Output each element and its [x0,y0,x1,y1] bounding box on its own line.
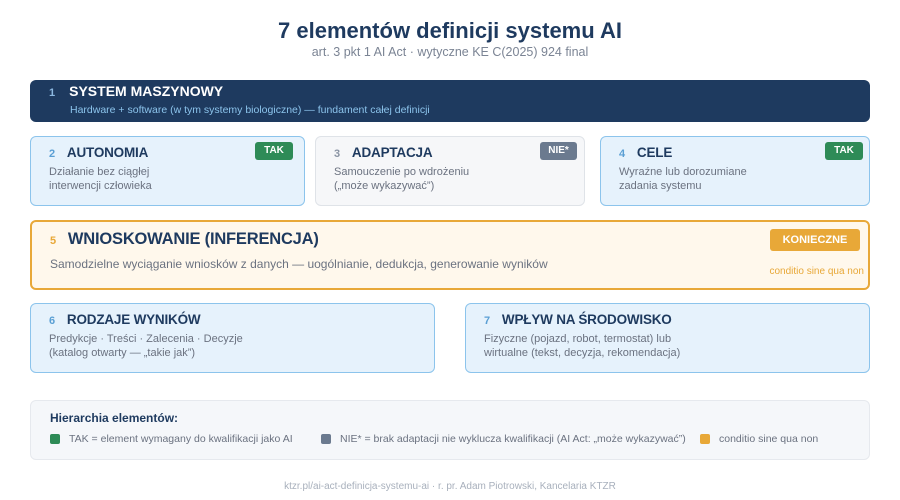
heading 2: 2 AUTONOMIA [49,145,148,160]
subtitle: art. 3 pkt 1 AI Act · wytyczne KE C(2025) 924 final [312,45,588,59]
panel 6: rodzaje wyników [30,303,435,373]
text 1: Hardware + software (w tym systemy biologiczne) — fundament całej definicji [70,104,430,116]
text 4: Wyraźne lub dorozumiane [619,166,747,178]
text 2 [49,166,152,192]
heading 1: 1 SYSTEM MASZYNOWY [49,83,223,99]
text 3: („może wykazywać”) [334,180,434,192]
title: 7 elementów definicji systemu AI [278,18,622,43]
badge konieczne [770,229,860,251]
note conditio: conditio sine qua non [769,266,864,277]
legend items: TAK = element wymagany do kwalifikacji jako AI [69,433,293,445]
text 4: zadania systemu [619,180,702,192]
text 6 [49,333,243,359]
heading 3: 3 ADAPTACJA [334,145,432,160]
text 5: Samodzielne wyciąganie wniosków z danych — uogólnianie, dedukcja, generowanie wyników [50,257,548,271]
text 7 [484,333,680,359]
heading 5: 5 WNIOSKOWANIE (INFERENCJA) [50,230,319,248]
panel 2: autonomia [30,136,305,206]
footer: ktzr.pl/ai-act-definicja-systemu-ai · r. pr. Adam Piotrowski, Kancelaria KTZR [284,481,616,492]
legend panel [30,400,870,460]
heading 6: 6 RODZAJE WYNIKÓW [49,312,200,327]
badge NIE: NIE* [548,145,569,156]
badge konieczne: KONIECZNE [783,234,847,246]
heading 4: 4 CELE [619,145,672,160]
badge TAK: TAK [834,145,854,156]
text 6: (katalog otwarty — „takie jak”) [49,347,195,359]
badge TAK [825,142,863,160]
badge NIE [540,142,577,160]
badge TAK: TAK [264,145,284,156]
text 2: interwencji człowieka [49,180,152,192]
panel 4: cele [600,136,870,206]
text 4 [619,166,747,192]
panel 1: system maszynowy [30,80,870,122]
legend heading: Hierarchia elementów: [50,411,178,425]
heading 7: 7 WPŁYW NA ŚRODOWISKO [484,312,672,327]
panel 5: wnioskowanie [30,220,870,290]
badge TAK [255,142,293,160]
text 3: Samouczenie po wdrożeniu [334,166,469,178]
text 7: wirtualne (tekst, decyzja, rekomendacja) [484,347,680,359]
text 3 [334,166,469,192]
panel 3: adaptacja [315,136,585,206]
legend items [50,433,818,445]
text 7: Fizyczne (pojazd, robot, termostat) lub [484,333,671,345]
text 2: Działanie bez ciągłej [49,166,149,178]
legend items: conditio sine qua non [719,433,818,445]
legend items: NIE* = brak adaptacji nie wyklucza kwalifikacji (AI Act: „może wykazywać”) [340,433,686,445]
text 6: Predykcje · Treści · Zalecenia · Decyzje [49,333,243,345]
panel 7: wpływ [465,303,870,373]
